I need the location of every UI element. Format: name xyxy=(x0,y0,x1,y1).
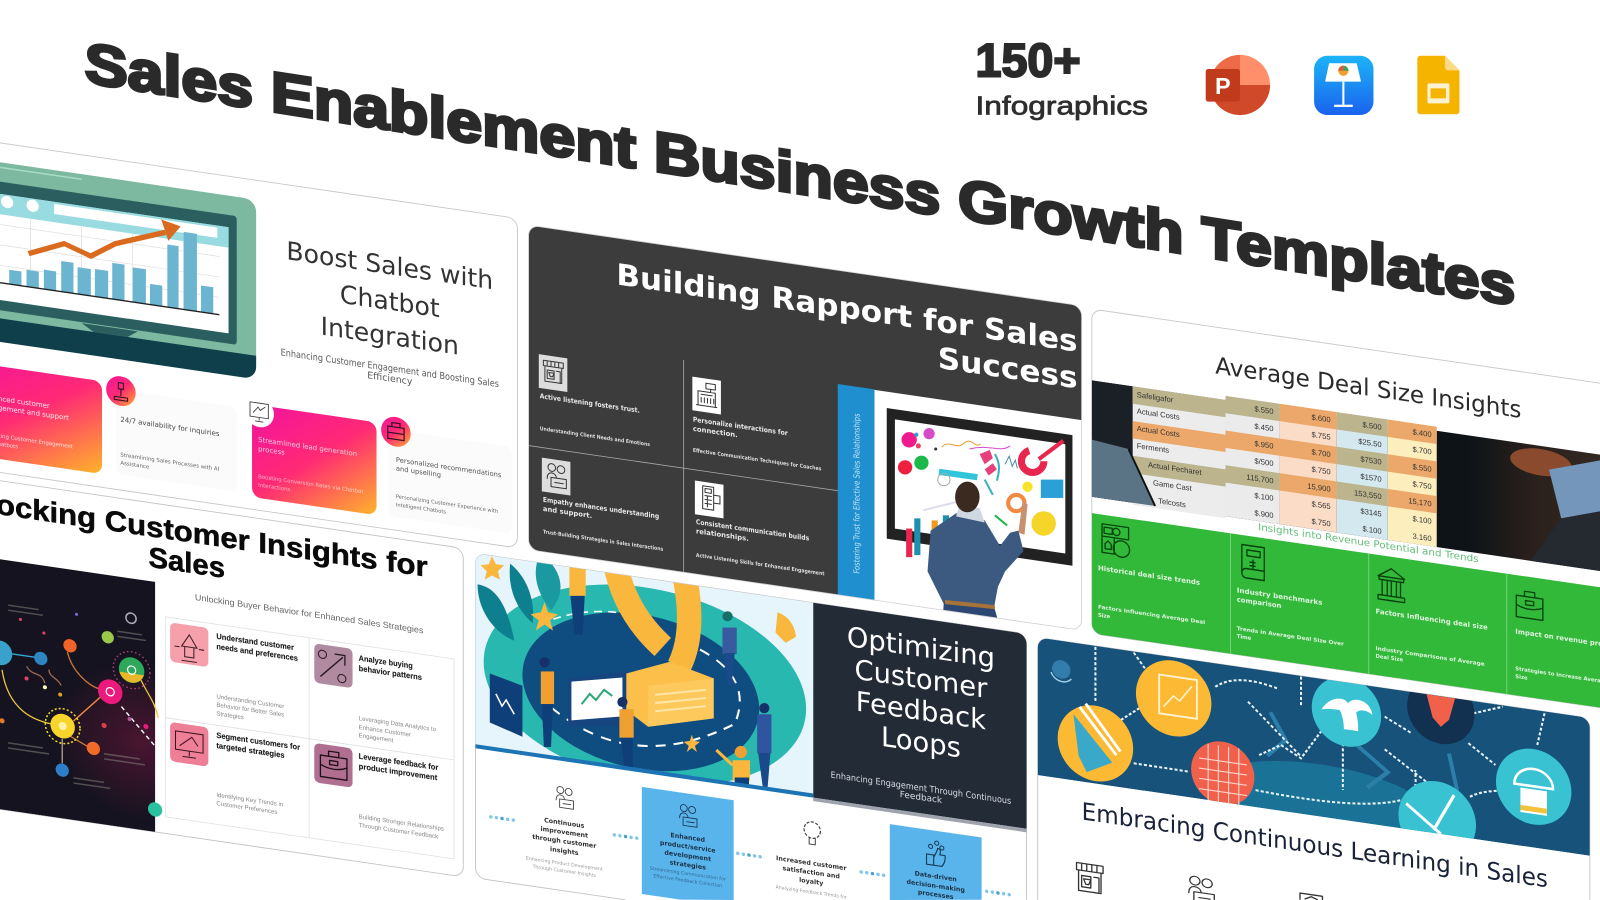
metric: benchmarks xyxy=(1237,544,1344,655)
cell: understand needs: Strategies xyxy=(216,710,244,721)
cell: segment customers: targeted strategies xyxy=(216,741,285,760)
list cell: consistent communication: relationships. xyxy=(696,527,749,543)
panel: Boost Sales with Chatbot Integration xyxy=(0,132,517,548)
subtitle: Feedback xyxy=(900,790,943,806)
cell: understand needs xyxy=(170,622,298,729)
photo: spreadsheet: $.550 xyxy=(1254,404,1273,416)
title text: Integration xyxy=(321,312,459,361)
subtitle: Efficiency xyxy=(367,370,413,388)
illustration: feedback loop team xyxy=(476,554,1026,832)
feature card: availability: 24/7 availability for inquiries xyxy=(120,416,220,438)
cell: analyze behavior: Leveraging Data Analytics to xyxy=(359,715,437,733)
cell: leverage feedback: Building Stronger Relationships xyxy=(359,813,444,833)
step: product development: Enhanced xyxy=(670,832,706,844)
cell: analyze behavior: behavior patterns xyxy=(359,664,422,682)
heading: Optimizing xyxy=(847,621,995,674)
cell: leverage feedback: Through Customer Feedback xyxy=(359,822,439,841)
list cell: consistent communication: Consistent communication builds xyxy=(696,518,809,543)
cell: segment customers: Identifying Key Trends in xyxy=(216,792,284,809)
photo: spreadsheet: $.950 xyxy=(1254,439,1273,451)
photo: spreadsheet: $.700 xyxy=(1311,447,1331,459)
stat: 150+ infographics: 150+ xyxy=(976,35,1081,87)
cell: understand needs: Understand customer xyxy=(216,632,294,652)
title text: Chatbot xyxy=(340,280,440,323)
metric: influencing factors: Industry Comparisons of Average xyxy=(1376,646,1485,668)
cell: segment customers: Customer Preferences xyxy=(216,800,277,816)
title: Sales Enablement Business Growth Templates xyxy=(85,31,1515,318)
green metrics band xyxy=(1092,513,1600,714)
list cell: empathy: Trust-Building Strategies in Sales Interactions xyxy=(543,529,663,553)
photo: spreadsheet xyxy=(1092,376,1600,580)
feature card: lead generation xyxy=(244,395,377,515)
list cell: empathy: and support. xyxy=(543,505,592,520)
icon: storefront xyxy=(1077,862,1103,894)
feature card: recommendations xyxy=(381,415,512,534)
heading xyxy=(847,621,995,769)
list cell: empathy: Empathy enhances understanding xyxy=(543,496,659,521)
step: continuous improvement: through customer xyxy=(532,834,597,850)
panel: Optimizing Customer Feedback Loops xyxy=(475,554,1027,900)
photo: spreadsheet: $.400 xyxy=(1412,427,1432,439)
icon: graduation xyxy=(1300,893,1322,900)
metric: influencing factors xyxy=(1376,568,1488,666)
cell: analyze behavior: Engagement xyxy=(359,732,394,744)
list cell: personalize: connection. xyxy=(693,425,738,439)
cell: segment customers xyxy=(170,722,300,819)
photo: spreadsheet: 15,170 xyxy=(1408,496,1432,509)
metric: benchmarks: Time xyxy=(1237,634,1252,642)
step: product development: Effective Feedback Collection xyxy=(653,873,722,889)
icon: Google Slides xyxy=(1417,56,1459,114)
step: product development xyxy=(642,787,734,900)
step: continuous improvement xyxy=(526,782,603,880)
cell: understand needs: Behavior for Better Sales xyxy=(216,702,284,719)
metric: influencing factors: Deal Size xyxy=(1376,654,1403,664)
step: continuous improvement: improvement xyxy=(540,826,588,840)
icon: mentor xyxy=(1189,875,1214,900)
photo: spreadsheet: $7530 xyxy=(1360,455,1382,467)
presenter xyxy=(928,482,1028,620)
panel: Unlocking Customer Insights for Sales xyxy=(0,463,463,877)
heading: Average Deal Size Insights xyxy=(1215,351,1521,424)
photo: man with beard xyxy=(1510,445,1600,571)
photo: spreadsheet: $.100 xyxy=(1362,524,1382,536)
photo: spreadsheet: Actual Costs xyxy=(1137,424,1180,439)
photo: spreadsheet: $.755 xyxy=(1311,430,1331,442)
side bar: Fostering Trust for Effective Sales Relationships xyxy=(852,413,862,574)
photo: spreadsheet: $.750 xyxy=(1311,517,1331,529)
cell: understand needs: Understanding Customer xyxy=(216,693,284,710)
list cell: consistent communication: Active Listening Skills for Enhanced Engagement xyxy=(696,553,825,578)
list cell: personalize xyxy=(692,377,821,473)
step: continuous improvement: Enhancing Product Development xyxy=(526,856,603,873)
photo: spreadsheet: $.550 xyxy=(1412,462,1432,474)
step: continuous improvement: Through Customer Insights xyxy=(532,864,597,879)
tagline: Insights into Revenue Potential and Trends xyxy=(1258,522,1479,565)
photo: spreadsheet: $.450 xyxy=(1254,422,1273,433)
feature card: lead generation: process xyxy=(258,445,285,457)
photo: spreadsheet: $.100 xyxy=(1254,491,1273,503)
panel: Embracing Continuous Learning in Sales xyxy=(1038,618,1590,900)
list cell: empathy xyxy=(542,458,663,553)
photo: spreadsheet: 15,900 xyxy=(1307,481,1331,494)
icon: PowerPoint: P xyxy=(1215,73,1231,99)
step: continuous improvement: Continuous xyxy=(544,817,585,830)
step: data-driven decisions: decision-making xyxy=(907,879,965,894)
metric: revenue impact: Size xyxy=(1515,674,1528,682)
title text xyxy=(286,236,493,366)
illustration: laptop with growth chart xyxy=(0,152,256,379)
cell: analyze behavior xyxy=(314,643,437,751)
photo: spreadsheet: $.700 xyxy=(1412,445,1432,457)
step: product development: development xyxy=(664,849,711,863)
subtitle: Unlocking Buyer Behavior for Enhanced Sales Strategies xyxy=(195,592,424,635)
photo: spreadsheet: $1570 xyxy=(1360,472,1382,484)
stat: 150+ infographics xyxy=(976,35,1148,120)
photo: spreadsheet: Ferments xyxy=(1137,441,1169,455)
feature card: recommendations: Personalizing Customer Experience with xyxy=(396,494,498,515)
cell: analyze behavior: Analyze buying xyxy=(359,654,413,671)
metric: historical trends: Historical deal size trends xyxy=(1098,564,1200,587)
list cell: active listening: Understanding Client Needs and Emotions xyxy=(540,426,650,448)
photo: spreadsheet: 153,550 xyxy=(1354,488,1382,501)
step: satisfaction: satisfaction and xyxy=(783,865,840,881)
photo: spreadsheet: $/500 xyxy=(1254,456,1273,468)
feature card: lead generation: Interactions xyxy=(258,483,290,493)
step: satisfaction: Increased customer xyxy=(776,855,847,872)
list cell: active listening: Active listening fosters trust. xyxy=(540,392,640,415)
side bar xyxy=(838,384,874,600)
photo: spreadsheet: Safeligafor xyxy=(1137,390,1174,405)
photo: spreadsheet: Actual Fecharet xyxy=(1148,460,1202,477)
subtitle: Enhancing Customer Engagement and Boosting Sales xyxy=(281,347,499,390)
heading: Sales xyxy=(148,542,225,585)
illustration: customer network xyxy=(0,542,162,833)
photo: spreadsheet: Game Cast xyxy=(1153,478,1193,493)
photo: spreadsheet: $25.50 xyxy=(1358,437,1382,449)
heading: Customer xyxy=(855,654,988,705)
photo: spreadsheet: Actual Costs xyxy=(1137,407,1180,422)
photo: spreadsheet: $.750 xyxy=(1412,479,1432,491)
step: satisfaction xyxy=(776,817,847,900)
heading: Success xyxy=(938,341,1078,396)
cell: analyze behavior: Enhance Customer xyxy=(359,724,411,739)
step: product development: product/service xyxy=(660,840,716,855)
heading xyxy=(0,482,428,614)
feature card: lead generation: Boosting Conversion Rates via Chatbot xyxy=(258,474,363,495)
list cell: active listening xyxy=(539,354,650,448)
panel: Building Rapport for Sales Success xyxy=(529,225,1082,647)
banner illustration: connected ideas xyxy=(1038,638,1590,856)
feature card: availability xyxy=(106,374,237,492)
photo: spreadsheet: 3.160 xyxy=(1412,532,1432,543)
photo: spreadsheet: $.750 xyxy=(1311,465,1331,476)
step: data-driven decisions: Data-driven xyxy=(915,870,957,884)
cell: leverage feedback xyxy=(314,743,444,841)
metric: benchmarks: comparison xyxy=(1237,596,1281,610)
illustration: presenter at screen xyxy=(874,390,1082,647)
step: product development: Streamlining Communication for xyxy=(650,866,726,883)
heading xyxy=(616,258,1078,396)
step: satisfaction: loyalty xyxy=(799,877,824,887)
metric: historical trends xyxy=(1098,523,1205,634)
feature card: recommendations: and upselling xyxy=(396,465,441,479)
photo: spreadsheet: Telcosts xyxy=(1158,496,1186,509)
metric: historical trends: Size xyxy=(1098,613,1111,620)
step: product development: strategies xyxy=(670,859,706,872)
feature card: availability: Assistance xyxy=(120,461,150,471)
feature card: recommendations: Intelligent Chatbots xyxy=(396,502,446,516)
metric: revenue impact xyxy=(1516,590,1600,682)
person figures xyxy=(539,563,771,791)
feature card: lead generation: Streamlined lead generation xyxy=(258,436,357,458)
metric: benchmarks: Industry benchmarks xyxy=(1237,586,1322,607)
photo: spreadsheet: $.600 xyxy=(1311,413,1331,424)
feature card: engagement xyxy=(0,357,102,474)
feature card: recommendations: Personalized recommendations xyxy=(396,456,502,479)
cell: segment customers: Segment customers for xyxy=(216,731,300,752)
list cell: personalize: Personalize interactions for xyxy=(693,416,788,437)
photo: spreadsheet: $.500 xyxy=(1362,420,1382,432)
feature card: availability: Streamlining Sales Processes with AI xyxy=(120,452,220,473)
photo: spreadsheet: $.900 xyxy=(1254,508,1273,520)
icon: Keynote xyxy=(1314,56,1373,115)
list cell: personalize: Effective Communication Techniques for Coaches xyxy=(693,448,821,473)
photo: spreadsheet: $.565 xyxy=(1311,499,1331,511)
metric: benchmarks: Trends in Average Deal Size Over xyxy=(1237,626,1344,648)
subtitle: Enhancing Engagement Through Continuous xyxy=(831,771,1012,807)
heading: Loops xyxy=(881,721,961,764)
metric: influencing factors: Factors Influencing deal size xyxy=(1376,607,1488,632)
stat: 150+ infographics: Infographics xyxy=(976,92,1148,120)
step: continuous improvement: insights xyxy=(550,846,579,857)
icon: PowerPoint xyxy=(1206,55,1270,115)
heading: Embracing Continuous Learning in Sales xyxy=(1082,797,1548,893)
cell: leverage feedback: product improvement xyxy=(359,762,438,782)
photo: spreadsheet: 115,700 xyxy=(1246,473,1273,485)
heading: Feedback xyxy=(856,686,986,736)
list cell: consistent communication xyxy=(695,481,825,578)
cell: leverage feedback: Leverage feedback for xyxy=(359,752,438,772)
heading: Building Rapport for Sales xyxy=(616,258,1078,360)
photo: spreadsheet: $3145 xyxy=(1360,507,1382,519)
step: data-driven decisions xyxy=(890,824,982,900)
title text: Boost Sales with xyxy=(286,236,493,295)
photo: spreadsheet: $.100 xyxy=(1412,514,1432,526)
panel: Average Deal Size Insights xyxy=(1092,309,1600,714)
metric: historical trends: Factors Influencing Average Deal xyxy=(1098,604,1205,626)
cell: understand needs: needs and preferences xyxy=(216,642,298,663)
